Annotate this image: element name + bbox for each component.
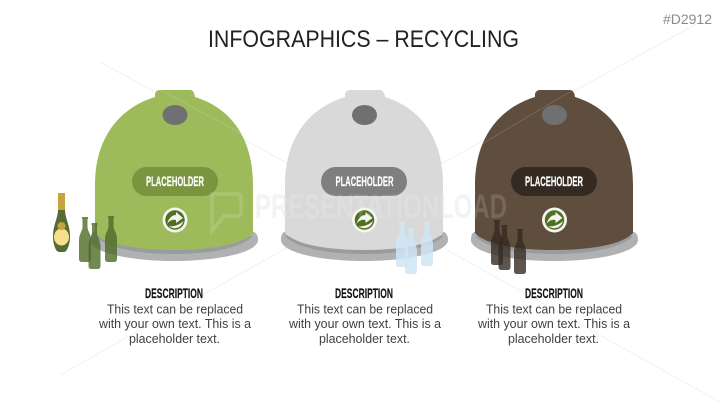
icon: green bottle 2 (88, 223, 100, 269)
bin body (285, 90, 443, 250)
icon: clear bottle 2 (405, 228, 417, 274)
icon: recycling symbol (352, 208, 377, 232)
watermark overlay on bins: PRESENTATIONLOAD (255, 188, 507, 226)
text block: description 3: DESCRIPTION (525, 285, 583, 301)
code label: #D2912 (663, 12, 712, 27)
text block: description 3 (477, 285, 630, 346)
text block: description 2: This text can be replaced (297, 302, 433, 316)
watermark text: PRESENTATIONLOAD (255, 188, 507, 226)
panel: brown bin (471, 90, 638, 274)
panel: green bin (53, 90, 258, 269)
text block: description 3: with your own text. This is a (477, 317, 630, 331)
text block: description 3: placeholder text. (508, 332, 599, 346)
label pill (511, 167, 597, 196)
text block: description 1: with your own text. This is a (98, 317, 251, 331)
icon: clear bottle 3 (421, 221, 433, 266)
label pill (321, 167, 407, 196)
text block: description 1: This text can be replaced (107, 302, 243, 316)
icon: green bottle 3 (105, 216, 117, 262)
icon: recycling symbol (162, 208, 188, 232)
bin base (90, 231, 258, 261)
label pill: PLACEHOLDER (525, 173, 583, 189)
bin opening (162, 105, 188, 125)
text block: description 2: placeholder text. (319, 332, 410, 346)
bin body (95, 90, 253, 250)
icon: clear bottle 1 (396, 221, 408, 267)
title: INFOGRAPHICS – RECYCLING (208, 26, 519, 53)
bin opening (542, 105, 567, 125)
panel: grey bin (281, 90, 448, 274)
bin base (281, 231, 448, 261)
text block: description 1: DESCRIPTION (145, 285, 203, 301)
icon: recycling symbol (542, 208, 567, 232)
label pill (132, 167, 218, 196)
bin body (475, 90, 633, 250)
text block: description 1: placeholder text. (129, 332, 220, 346)
icon: dark bottle 1 (491, 220, 503, 265)
bin base (471, 231, 638, 261)
text block: description 2 (288, 285, 441, 346)
watermark logo (212, 194, 241, 231)
text block: description 3: This text can be replaced (486, 302, 622, 316)
icon: champagne bottle (53, 193, 70, 252)
icon: dark bottle 2 (498, 225, 510, 270)
bin opening (352, 105, 377, 125)
text block: description 2: with your own text. This is a (288, 317, 441, 331)
label pill: PLACEHOLDER (336, 173, 394, 189)
icon: dark bottle 3 (514, 229, 526, 274)
text block: description 1 (98, 285, 251, 346)
text block: description 2: DESCRIPTION (335, 285, 393, 301)
watermark overlay on bins (143, 80, 590, 231)
label pill: PLACEHOLDER (146, 173, 204, 189)
icon: green bottle 1 (79, 217, 91, 262)
